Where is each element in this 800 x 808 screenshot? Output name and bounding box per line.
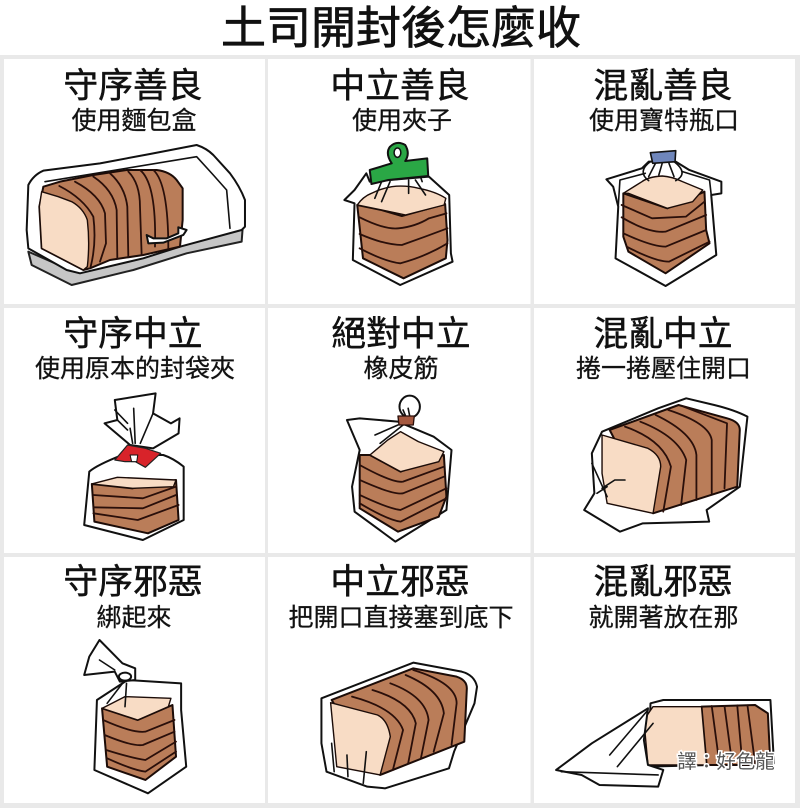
icon: rolled bag under loaf	[584, 398, 747, 532]
panel: lawful evil	[4, 557, 265, 803]
heading: chaotic good: 混亂善良	[593, 66, 733, 106]
icon: bag with rubber band	[347, 396, 452, 542]
subtext: neutral evil: 把開口直接塞到底下	[288, 604, 514, 632]
subtext: lawful evil: 綁起來	[96, 604, 172, 632]
icon: open bag	[556, 700, 774, 787]
icon: bag with clip	[344, 143, 453, 285]
panel: lawful neutral	[4, 308, 265, 553]
heading: chaotic evil: 混亂邪惡	[593, 562, 733, 602]
subtext: chaotic neutral: 捲一捲壓住開口	[576, 355, 751, 383]
heading: lawful good: 守序善良	[63, 66, 203, 106]
icon: bag with twist tag	[84, 393, 184, 540]
panel: lawful good	[4, 59, 265, 304]
heading: lawful neutral: 守序中立	[63, 314, 203, 354]
panel: true neutral	[268, 308, 530, 553]
heading: neutral good: 中立善良	[330, 66, 470, 106]
panel: chaotic evil	[534, 557, 795, 803]
subtext: neutral good: 使用夾子	[352, 107, 452, 135]
icon: bread box	[27, 145, 245, 285]
heading: chaotic neutral: 混亂中立	[593, 314, 733, 354]
title: 土司開封後怎麼收	[221, 2, 581, 54]
subtext: lawful neutral: 使用原本的封袋夾	[35, 355, 235, 383]
subtext: true neutral: 橡皮筋	[363, 355, 439, 383]
heading: true neutral: 絕對中立	[331, 314, 471, 354]
heading: neutral evil: 中立邪惡	[330, 562, 470, 602]
icon: bag tucked under loaf	[321, 663, 477, 788]
panel: chaotic neutral	[534, 308, 795, 553]
subtext: chaotic good: 使用寶特瓶口	[589, 107, 739, 135]
icon: tied bag	[84, 640, 186, 793]
icon: bag with bottle neck	[606, 151, 721, 286]
panel: neutral good	[268, 59, 530, 304]
panel: neutral evil	[268, 557, 530, 803]
heading: lawful evil: 守序邪惡	[63, 562, 203, 602]
panel: chaotic good	[534, 59, 795, 304]
watermark: 譯：好色龍	[677, 751, 775, 773]
subtext: chaotic evil: 就開著放在那	[588, 604, 739, 632]
subtext: lawful good: 使用麵包盒	[71, 107, 197, 135]
